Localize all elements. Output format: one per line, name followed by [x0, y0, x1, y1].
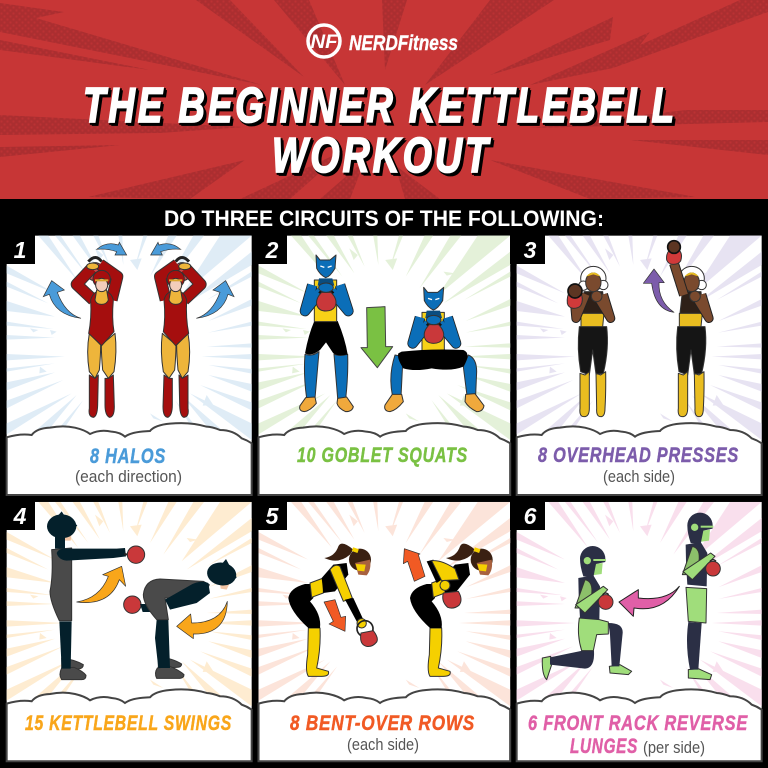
figure: hinged swing	[124, 559, 238, 678]
number tab 2: 2	[265, 237, 279, 263]
figure: standing	[682, 513, 720, 680]
arrow: left	[619, 586, 679, 616]
logo wordmark: NERDFitness	[349, 32, 458, 55]
label: lunges: LUNGES	[570, 735, 638, 758]
note: each side: (each side)	[347, 736, 419, 754]
panel 5: bent-over rows	[252, 501, 510, 761]
label: 10 goblet squats: 10 GOBLET SQUATS	[297, 444, 468, 467]
title: WORKOUT	[272, 129, 491, 183]
figure: squatting	[385, 287, 484, 412]
hood	[47, 511, 77, 538]
arrow: down	[361, 307, 393, 368]
subheading: DO THREE CIRCUITS OF THE FOLLOWING:	[164, 206, 604, 231]
hood	[205, 559, 238, 588]
number tab 3: 3	[524, 237, 537, 263]
illustration: swings	[47, 511, 238, 680]
burst rays	[0, 0, 768, 199]
logo	[308, 25, 458, 57]
number tab 3	[510, 235, 545, 264]
figure: arm extended	[288, 544, 377, 676]
note: per side: (per side)	[643, 739, 705, 757]
arrow: down	[324, 600, 346, 631]
figure: rack position	[567, 266, 611, 417]
panel 2: goblet squats	[252, 235, 510, 495]
figure: standing	[300, 255, 353, 412]
arrow: down swing	[177, 601, 227, 639]
number tab 2	[252, 235, 287, 264]
number tab 5: 5	[266, 503, 280, 529]
header banner	[0, 0, 768, 199]
note: each side: (each side)	[603, 468, 675, 486]
figure: lunge	[542, 546, 632, 680]
panel 6: reverse lunges	[510, 501, 762, 761]
panel 3: overhead presses	[510, 235, 762, 495]
upper body	[305, 255, 348, 322]
illustration: lunges	[542, 513, 720, 680]
illustration: squats	[300, 255, 484, 412]
panel 4: kettlebell swings	[0, 501, 252, 761]
number tab 6: 6	[524, 503, 537, 529]
panel 1: halos	[0, 235, 252, 495]
arrow: up swing	[77, 566, 126, 603]
number tab 1: 1	[14, 237, 26, 263]
number tab 5	[252, 501, 287, 530]
illustration: presses	[567, 241, 709, 417]
figure: standing swing	[47, 511, 145, 680]
label: 15 kettlebell swings: 15 KETTLEBELL SWINGS	[25, 712, 232, 735]
number tab 4: 4	[13, 503, 27, 529]
arrow: left rotation	[43, 242, 127, 318]
figure: row pulled	[410, 544, 493, 676]
number tab 4	[0, 501, 35, 530]
illustration: halos	[43, 242, 234, 417]
label: 8 bent-over rows: 8 BENT-OVER ROWS	[290, 712, 475, 735]
number tab 1	[0, 235, 35, 264]
title	[83, 79, 677, 183]
note: each direction: (each direction)	[75, 468, 182, 486]
figure: pressing	[667, 241, 709, 417]
arrow: up	[643, 269, 674, 312]
figure: halo pose	[77, 257, 117, 417]
number tab 6	[510, 501, 545, 530]
illustration: rows	[288, 544, 493, 676]
label: 8 halos: 8 HALOS	[90, 445, 166, 468]
arrow: up	[403, 549, 425, 581]
logo mark	[308, 25, 340, 57]
logo mark: NF	[310, 32, 339, 53]
